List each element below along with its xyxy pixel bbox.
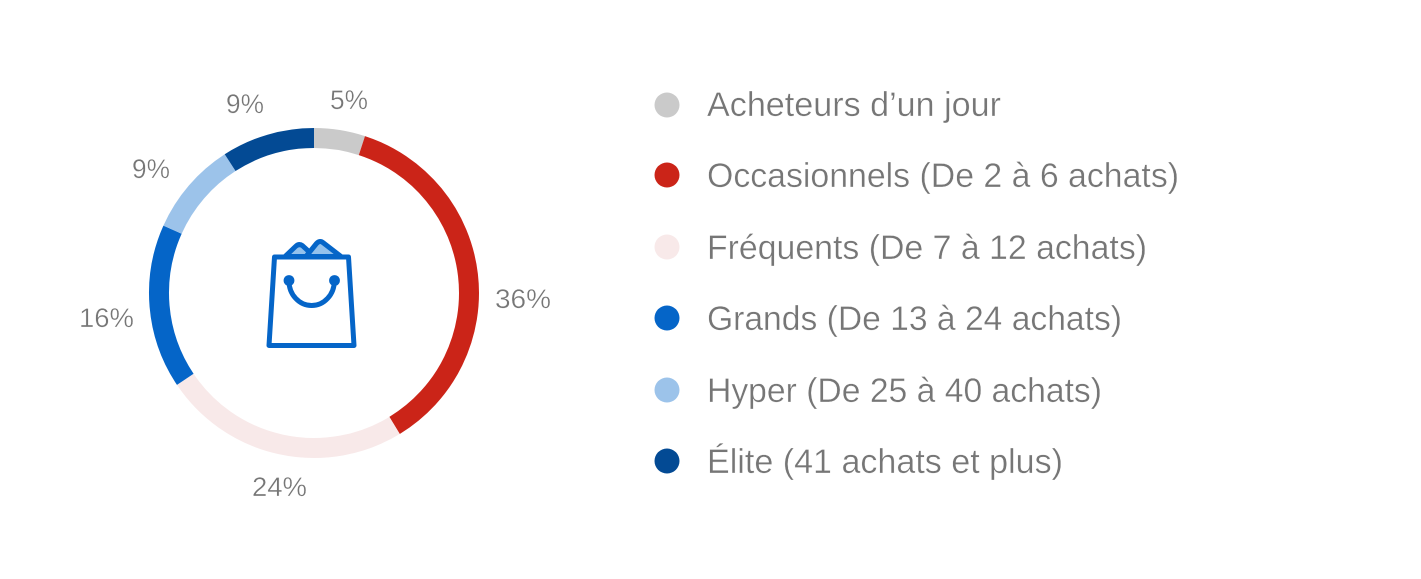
segment: Élite 9%	[230, 138, 314, 163]
donut chart	[159, 138, 469, 448]
legend item: Élite: Élite (41 achats et plus)	[707, 443, 1063, 481]
label 5%: 5%	[330, 85, 368, 115]
label 9% (Hyper): 9%	[132, 154, 170, 184]
handle ends	[284, 275, 340, 286]
segment: Acheteurs d'un jour 5%	[314, 138, 362, 146]
legend item: Acheteurs: Acheteurs d’un jour	[707, 86, 1001, 124]
label 36%: 36%	[495, 284, 551, 314]
legend item: Occasionnels: Occasionnels (De 2 à 6 achats)	[707, 157, 1179, 195]
segment: Hyper 9%	[173, 163, 230, 230]
legend item: Grands: Grands (De 13 à 24 achats)	[707, 300, 1122, 338]
label 24%: 24%	[252, 472, 307, 502]
legend	[654, 86, 1179, 481]
legend item: Hyper: Hyper (De 25 à 40 achats)	[707, 372, 1102, 410]
bag contents: right hill	[306, 242, 341, 256]
bag handle	[289, 281, 334, 306]
bag contents: left hill	[285, 245, 311, 256]
legend item: Fréquents: Fréquents (De 7 à 12 achats)	[707, 229, 1147, 267]
segment: Fréquents 24%	[185, 379, 395, 448]
segment: Grands 16%	[159, 230, 185, 379]
label 16%: 16%	[79, 303, 134, 333]
label 9% (Élite): 9%	[226, 89, 264, 119]
percentage labels	[79, 85, 551, 502]
segment: Occasionnels 36%	[362, 146, 469, 425]
icon: shopping bag	[269, 242, 354, 346]
bag body	[269, 257, 354, 346]
